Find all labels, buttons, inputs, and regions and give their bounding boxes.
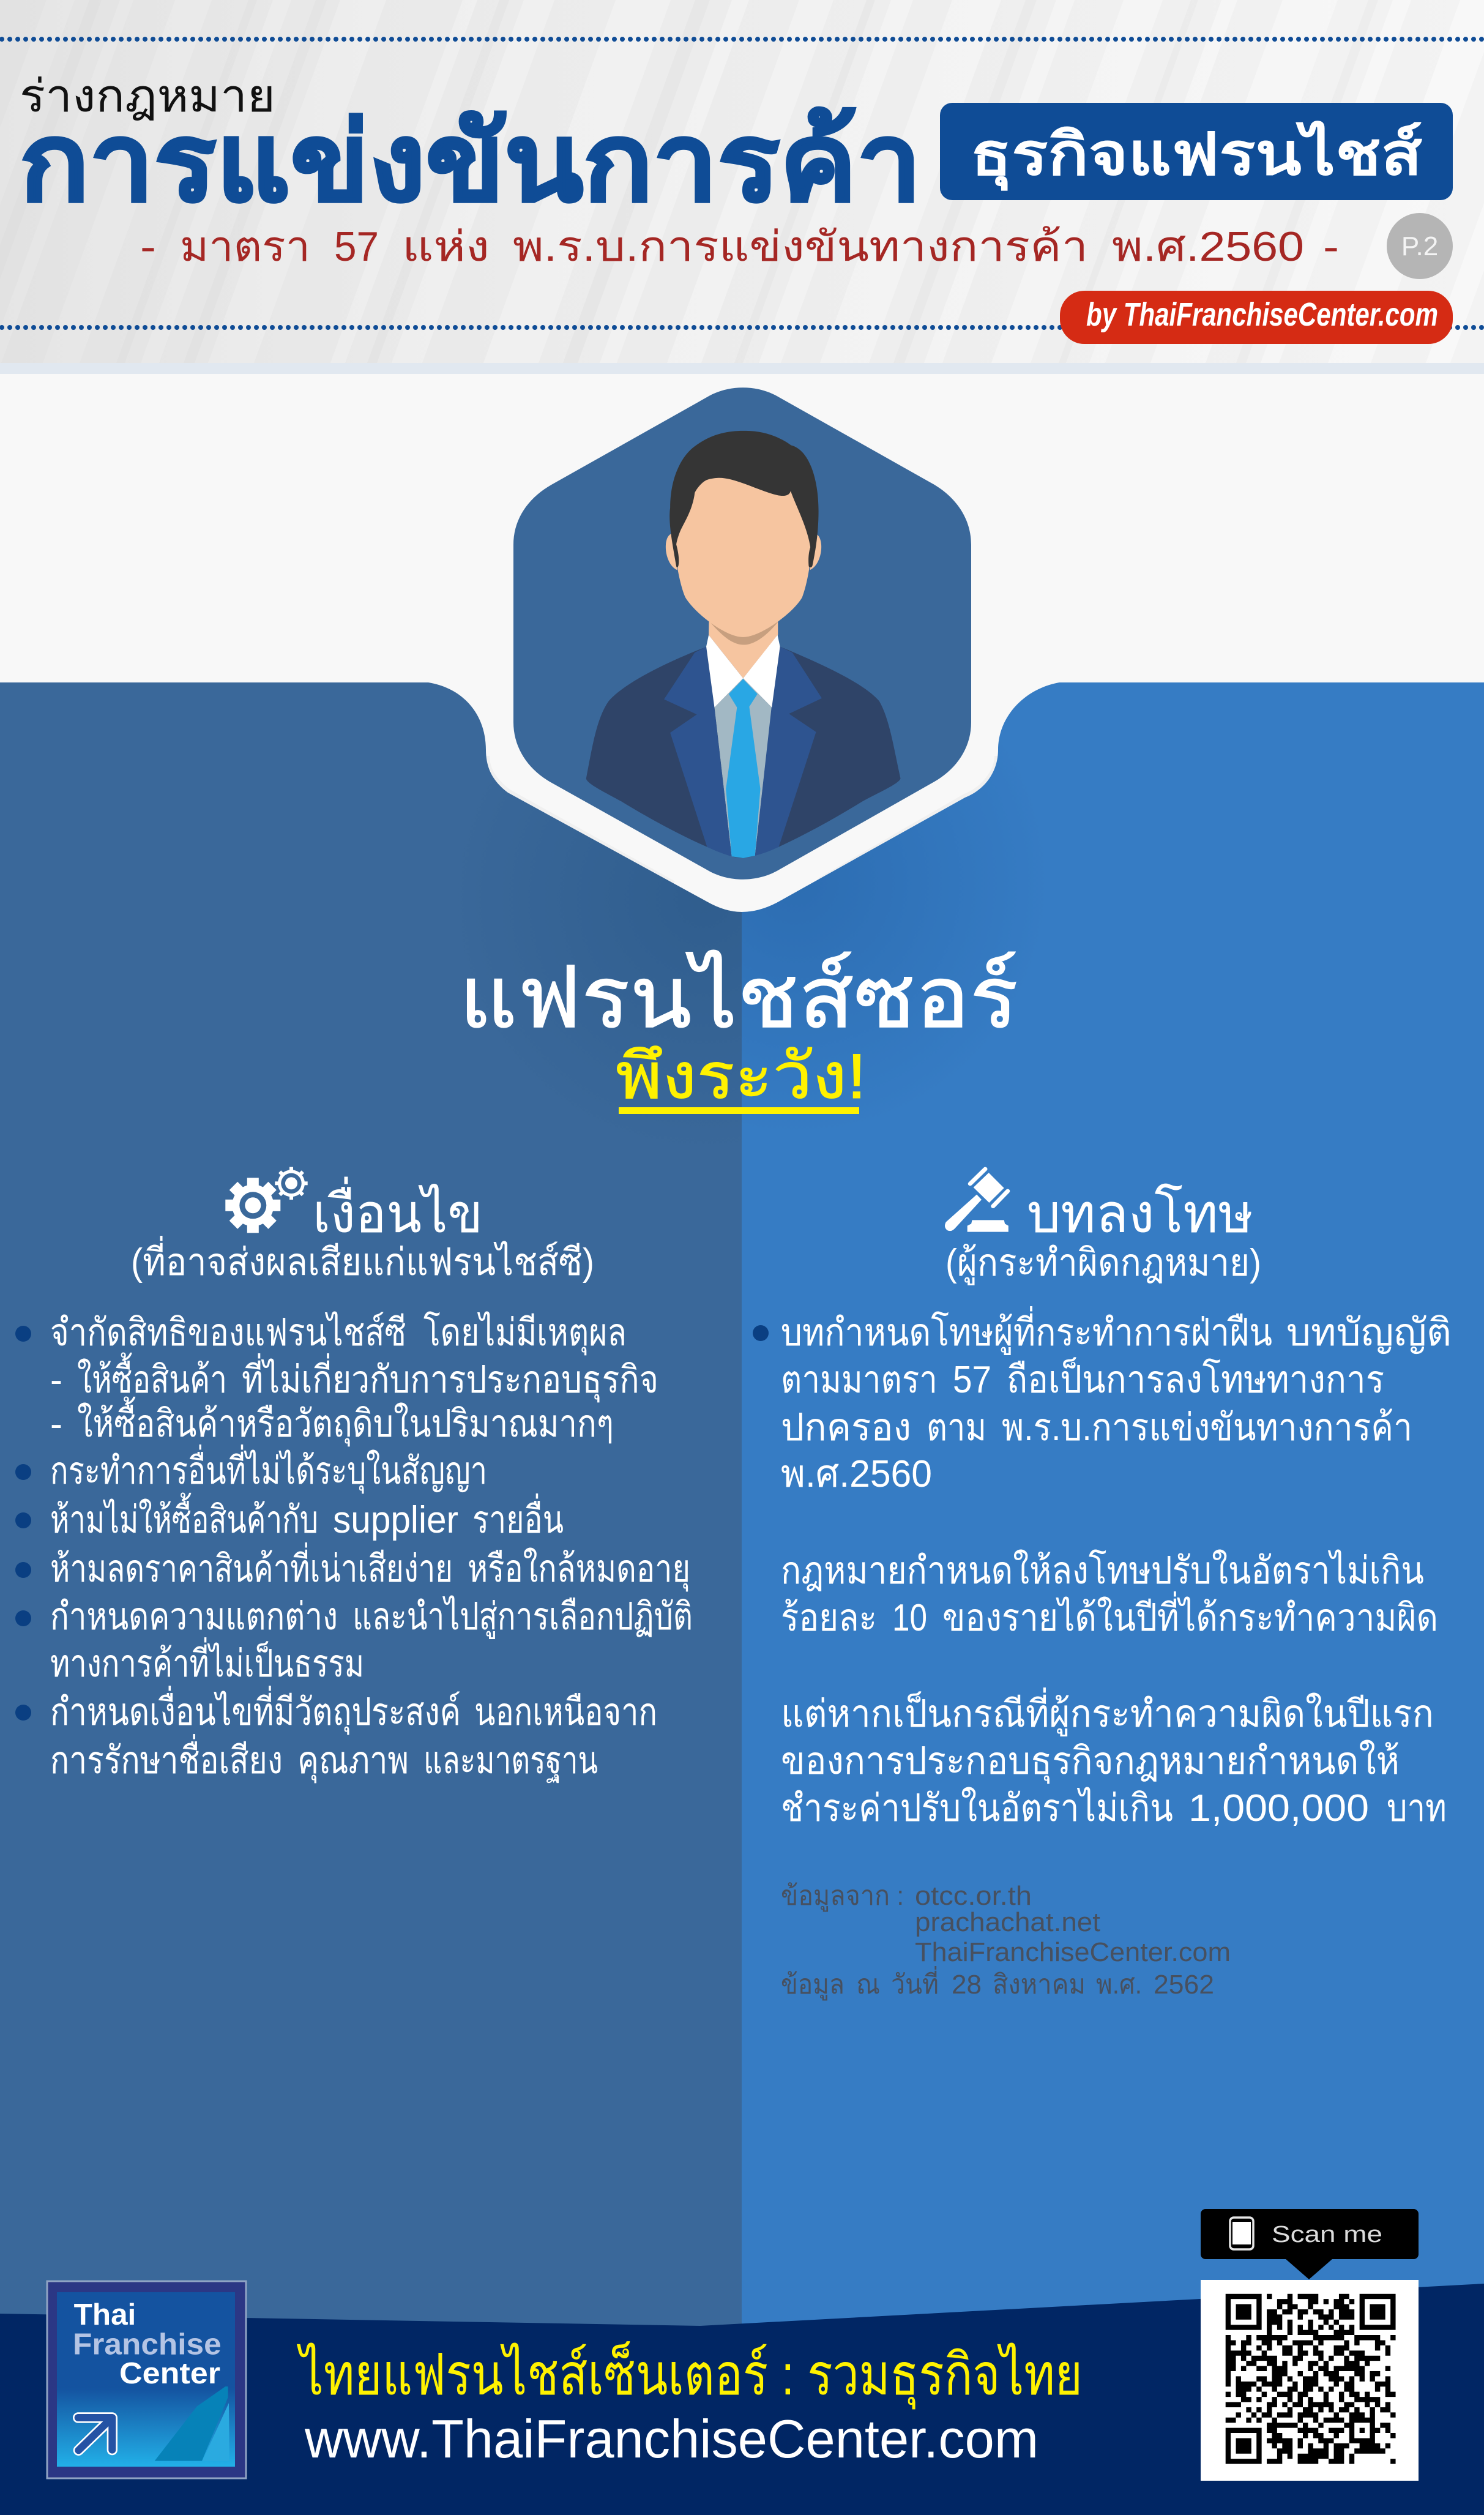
panel: left conditions background (0, 682, 742, 2515)
list: conditions (15, 1311, 693, 1783)
paragraph: fine rate: ร้อยละ (781, 1597, 877, 1639)
callout: scan me: Scan me (1272, 2222, 1382, 2248)
paragraph: first year fine: บาท (1387, 1787, 1447, 1829)
list item: restrict rights: จำกัดสิทธิของแฟรนไชส์ซี (50, 1311, 406, 1354)
badge: franchise business (940, 103, 1453, 200)
logo arrow and wing (78, 2386, 229, 2461)
text block: sources: พ.ศ. (1096, 1970, 1142, 2000)
paragraph: fine rate: 10 (892, 1597, 927, 1639)
paragraph: administrative penalty: ถือเป็นการลงโทษทางการ (1007, 1357, 1384, 1401)
list item: extra conditions: นอกเหนือจาก (474, 1691, 657, 1733)
icon: gavel (945, 1169, 1009, 1232)
hair (669, 431, 819, 567)
shirt (714, 678, 772, 856)
paragraph: administrative penalty: บทบัญญัติ (1286, 1312, 1452, 1354)
paragraph: administrative penalty (781, 1306, 1452, 1495)
list item: discrimination: กำหนดความแตกต่าง (50, 1596, 338, 1638)
text block: sources: prachachat.net (915, 1907, 1100, 1937)
suit jacket (586, 646, 900, 858)
list item: no price cuts: หรือใกล้หมดอายุ (468, 1547, 690, 1591)
paragraph: administrative penalty: ตาม (927, 1407, 986, 1449)
logo wordmark: Thai (74, 2298, 136, 2331)
list item: restrict rights: ที่ไม่เกี่ยวกับการประกอบธุรกิจ (242, 1353, 658, 1402)
text block: sources: ณ (856, 1970, 880, 2000)
list item: restrict rights: โดยไม่มีเหตุผล (423, 1311, 627, 1355)
paragraph: administrative penalty: ปกครอง (781, 1407, 911, 1449)
subtitle: พ.ร.บ.การแข่งขันทางการค้า (513, 223, 1088, 270)
list item: discrimination: และนำไปสู่การเลือกปฏิบัติ (352, 1595, 693, 1639)
text block: penalties (753, 1306, 1452, 1829)
list item: extra conditions: การรักษาชื่อเสียง (50, 1734, 283, 1782)
logo wordmark (73, 2298, 222, 2390)
heading: beware: พึงระวัง! (616, 1041, 867, 1112)
text block: sources: ThaiFranchiseCenter.com (915, 1937, 1231, 1967)
subheading: conditions: (ที่อาจส่งผลเสียแก่แฟรนไชส์ซี) (131, 1236, 594, 1284)
list item: restrict rights (15, 1311, 658, 1446)
list item: restrict rights: ให้ซื้อสินค้าหรือวัตถุดิบในปริมาณมากๆ (77, 1396, 614, 1446)
logo: Thai Franchise Center (47, 2281, 246, 2478)
text block: sources: ข้อมูล (781, 1970, 845, 2001)
list item: restrict rights: - (50, 1359, 62, 1401)
page number badge (1387, 213, 1453, 279)
panel: header (0, 0, 1484, 374)
logo wordmark: Franchise (73, 2328, 222, 2361)
tie (726, 679, 760, 858)
paragraph: first year fine (781, 1687, 1447, 1829)
callout: scan me (1201, 2209, 1419, 2279)
paragraph: administrative penalty: บทกำหนดโทษผู้ที่กระทำการฝ่าฝืน (781, 1306, 1272, 1355)
list item: extra conditions: กำหนดเงื่อนไขที่มีวัตถุประสงค์ (50, 1686, 461, 1735)
badge: source credit (1060, 291, 1453, 344)
list item: restrict rights: - (50, 1403, 62, 1445)
list item: no price cuts: ห้ามลดราคาสินค้าที่เน่าเสียง่าย (50, 1542, 453, 1590)
footer text: thai franchise center slogan: ไทยแฟรนไชส์เซ็นเตอร์ : รวมธุรกิจไทย (296, 2341, 1083, 2410)
list item: other actions: กระทำการอื่นที่ไม่ได้ระบุในสัญญา (50, 1444, 487, 1493)
text block: sources: 2562 (1154, 1970, 1214, 2000)
paragraph: first year fine: แต่หากเป็นกรณีที่ผู้กระทำความผิดในปีแรก (781, 1687, 1434, 1736)
subheading: penalties: (ผู้กระทำผิดกฎหมาย) (945, 1242, 1261, 1285)
list item: extra conditions: คุณภาพ (297, 1740, 409, 1783)
list item: other suppliers (15, 1492, 564, 1541)
text block: sources: วันที่ (891, 1965, 939, 2000)
subtitle: - (140, 223, 156, 270)
neck shadow (709, 613, 778, 645)
ears (666, 534, 821, 570)
heading: draft law: ร่างกฎหมาย (20, 70, 275, 121)
list item: other actions (15, 1444, 487, 1493)
icon: phone (1230, 2218, 1253, 2249)
subtitle: 57 (334, 223, 379, 270)
neck (709, 613, 778, 678)
subtitle: - (1323, 223, 1339, 270)
subtitle: มาตรา (180, 223, 310, 270)
face (674, 473, 812, 637)
list item: extra conditions (15, 1686, 657, 1783)
text block: sources: 28 (952, 1970, 982, 2000)
paragraph: first year fine: ของการประกอบธุรกิจกฎหมายกำหนดให้ (781, 1740, 1400, 1784)
paragraph: first year fine: 1,000,000 (1188, 1787, 1369, 1829)
heading: trade competition: การแข่งขันการค้า (20, 102, 922, 223)
paragraph: administrative penalty: พ.ศ.2560 (781, 1453, 932, 1495)
subtitle: แห่ง (402, 223, 490, 270)
list item: restrict rights: ให้ซื้อสินค้า (77, 1352, 227, 1401)
list item: discrimination: ทางการค้าที่ไม่เป็นธรรม (50, 1637, 364, 1685)
paragraph: administrative penalty: 57 (953, 1359, 991, 1401)
paragraph: administrative penalty: พ.ร.บ.การแข่งขันทางการค้า (1002, 1407, 1412, 1449)
list item: no price cuts (15, 1542, 690, 1591)
paragraph: fine rate (781, 1549, 1438, 1639)
QR code (1201, 2280, 1419, 2481)
list item: other suppliers: รายอื่น (472, 1493, 564, 1541)
heading: penalties: บทลงโทษ (1027, 1183, 1253, 1244)
bullet (753, 1325, 769, 1341)
list item: extra conditions: และมาตรฐาน (423, 1740, 598, 1783)
lapels (664, 646, 822, 856)
text block: sources: otcc.or.th (915, 1881, 1032, 1911)
list item: other suppliers: supplier (333, 1499, 458, 1541)
subtitle (140, 223, 1339, 270)
paragraph: first year fine: ชำระค่าปรับในอัตราไม่เกิน (781, 1787, 1173, 1829)
text block: sources: ข้อมูลจาก : (781, 1881, 904, 1912)
text block: sources: สิงหาคม (993, 1970, 1086, 2000)
text block: sources (781, 1881, 1231, 2001)
list item: other suppliers: ห้ามไม่ให้ซื้อสินค้ากับ (50, 1492, 318, 1541)
icon: hexagon portrait of businessman (513, 387, 971, 880)
heading: conditions: เงื่อนไข (313, 1176, 483, 1244)
page number badge: P.2 (1401, 231, 1438, 261)
list item: discrimination (15, 1595, 693, 1685)
heading: franchisor: แฟรนไชส์ซอร์ (459, 949, 1018, 1045)
collar (706, 635, 780, 708)
logo wordmark: Center (119, 2357, 220, 2390)
panel: footer band (0, 2284, 1484, 2515)
subtitle: พ.ศ.2560 (1112, 223, 1304, 270)
paragraph: administrative penalty: ตามมาตรา (781, 1359, 938, 1401)
icon: gears (225, 1167, 308, 1233)
panel: right penalties background (742, 682, 1484, 2515)
badge: franchise business: ธุรกิจแฟรนไชส์ (971, 121, 1422, 191)
footer text: website: www.ThaiFranchiseCenter.com (304, 2408, 1038, 2469)
